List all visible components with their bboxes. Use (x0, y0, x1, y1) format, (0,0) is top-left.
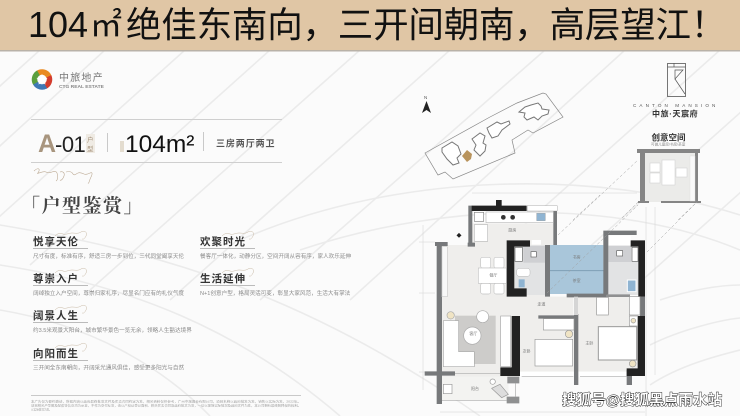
floor plan (425, 200, 645, 404)
room labels: 次卧 (523, 347, 531, 353)
grey walls (425, 206, 645, 404)
feature: 生活延伸: N+1创意户型，格局灵活可变，彰显大家风范，生活大有掌法 (200, 289, 351, 297)
feature: 尊崇入户 (33, 268, 184, 297)
logo: CTG Real Estate: CTG REAL ESTATE (59, 84, 105, 90)
flex room plan (637, 149, 701, 203)
flex room heading (651, 132, 686, 146)
feature: 悦享天伦: 悦享天伦 (33, 235, 79, 248)
feature: 悦享天伦 (33, 231, 184, 260)
title banner (0, 0, 740, 52)
room labels (469, 227, 593, 391)
unit code A-01: 户 (87, 135, 94, 144)
feature: 向阳而生: 三开间全东南朝向，开阔采光通风俱佳，感受更多阳光与自然 (33, 364, 184, 372)
signature script (34, 169, 92, 183)
unit code A-01 (38, 130, 95, 158)
feature: 向阳而生 (33, 343, 184, 372)
creative rooms: blue (548, 245, 605, 294)
bedroom furniture (535, 297, 640, 367)
room labels: 阳台 (471, 385, 479, 391)
unit code A-01: A (38, 130, 56, 158)
section heading: 「户型鉴赏」 (21, 191, 144, 218)
projection guide lines (547, 160, 697, 293)
legal disclaimer: 本广告仅为要约邀请，所载内容以政府最终批准文件及买卖合同约定为准，相关资料仅供参考，广州中旅置业有限公司，项目名称以政府批准为准，销售以实际为准，2022年。 (31, 400, 301, 404)
legal disclaimer: 以实际情况为准。 (31, 408, 52, 412)
rug (455, 316, 496, 364)
feature: 悦享天伦: 尺寸有度，标准有序，舒适三房一步到位，三代同堂阖享天伦 (33, 252, 184, 260)
feature: 阔景人生: 约3.5米观景大阳台，城市繁华景色一览无余，领略人生豁达境界 (33, 326, 192, 334)
room labels: 书房 (573, 253, 581, 259)
room labels: 餐厅 (489, 271, 497, 277)
feature: 阔景人生: 阔景人生 (33, 309, 79, 322)
room labels: 走道 (537, 300, 545, 306)
title banner: ㎡ (90, 0, 122, 46)
project logo: Canton Mansion (633, 63, 718, 118)
feature: 欢聚时光 (200, 231, 351, 260)
highlighted unit (462, 150, 472, 162)
unit code A-01: -01 (55, 132, 86, 157)
compass: north arrow (422, 95, 431, 113)
entry marker (457, 233, 461, 237)
floor (442, 223, 640, 400)
logo: CTG Real Estate (31, 69, 105, 90)
room labels: 客厅 (469, 330, 477, 336)
balcony furniture (443, 379, 508, 398)
unit spec bar (31, 119, 282, 163)
kitchen fittings (474, 212, 553, 241)
feature: 欢聚时光: 欢聚时光 (200, 235, 246, 248)
unit area 104 m²: 104m² (125, 131, 194, 158)
room labels: 厨房 (508, 227, 516, 233)
balcony and window strips (442, 377, 508, 400)
site key plan (425, 93, 563, 179)
sofa and coffee table (442, 247, 511, 367)
dining table (478, 257, 506, 294)
feature: 生活延伸 (200, 268, 351, 297)
project logo: Canton Mansion: CANTON MANSION (633, 103, 718, 108)
watermark: 搜狐号@搜狐黑点雨水站 (562, 391, 723, 409)
feature: 向阳而生: 向阳而生 (33, 347, 79, 360)
room layout: 三房两厅两卫 (216, 138, 275, 148)
title banner: 104 (28, 4, 88, 45)
project logo: Canton Mansion: 中旅·天宸府 (652, 108, 698, 118)
dimension lines (419, 193, 655, 416)
logo: CTG Real Estate: 中旅地产 (59, 71, 104, 84)
legal disclaimer: 项目相关户型图及配套等信息均为示意，不作为交付标准，请以产权证登记面积、相关买卖合同及政府批文为准，一切以现场实际情况及政府文件为准，本公司拥有最终解释权的权利。 (31, 404, 301, 408)
compass: north arrow: N (424, 95, 427, 100)
feature: 欢聚时光: 餐客厅一体化，动静分区，空间开阔从容有序，家人欢乐延伸 (200, 252, 351, 260)
title banner: 绝佳东南向，三开间朝南，高层望江！ (126, 5, 726, 45)
unit code A-01: 型 (87, 144, 94, 153)
room labels: 主卧 (585, 339, 593, 345)
legal disclaimer (31, 395, 301, 412)
flex room heading: 可做儿童房/书房/茶室 (651, 142, 686, 146)
bathrooms (515, 236, 638, 295)
feature: 尊崇入户: 阔绰独立入户空间，尊崇归家礼序，尽显名门应有的礼仪气度 (33, 289, 184, 297)
room labels: 茶室 (573, 277, 581, 283)
feature: 尊崇入户: 尊崇入户 (33, 272, 79, 285)
feature: 阔景人生 (33, 305, 192, 334)
feature: 生活延伸: 生活延伸 (200, 272, 246, 285)
black walls (472, 200, 645, 376)
flex room heading: 创意空间 (652, 132, 686, 142)
